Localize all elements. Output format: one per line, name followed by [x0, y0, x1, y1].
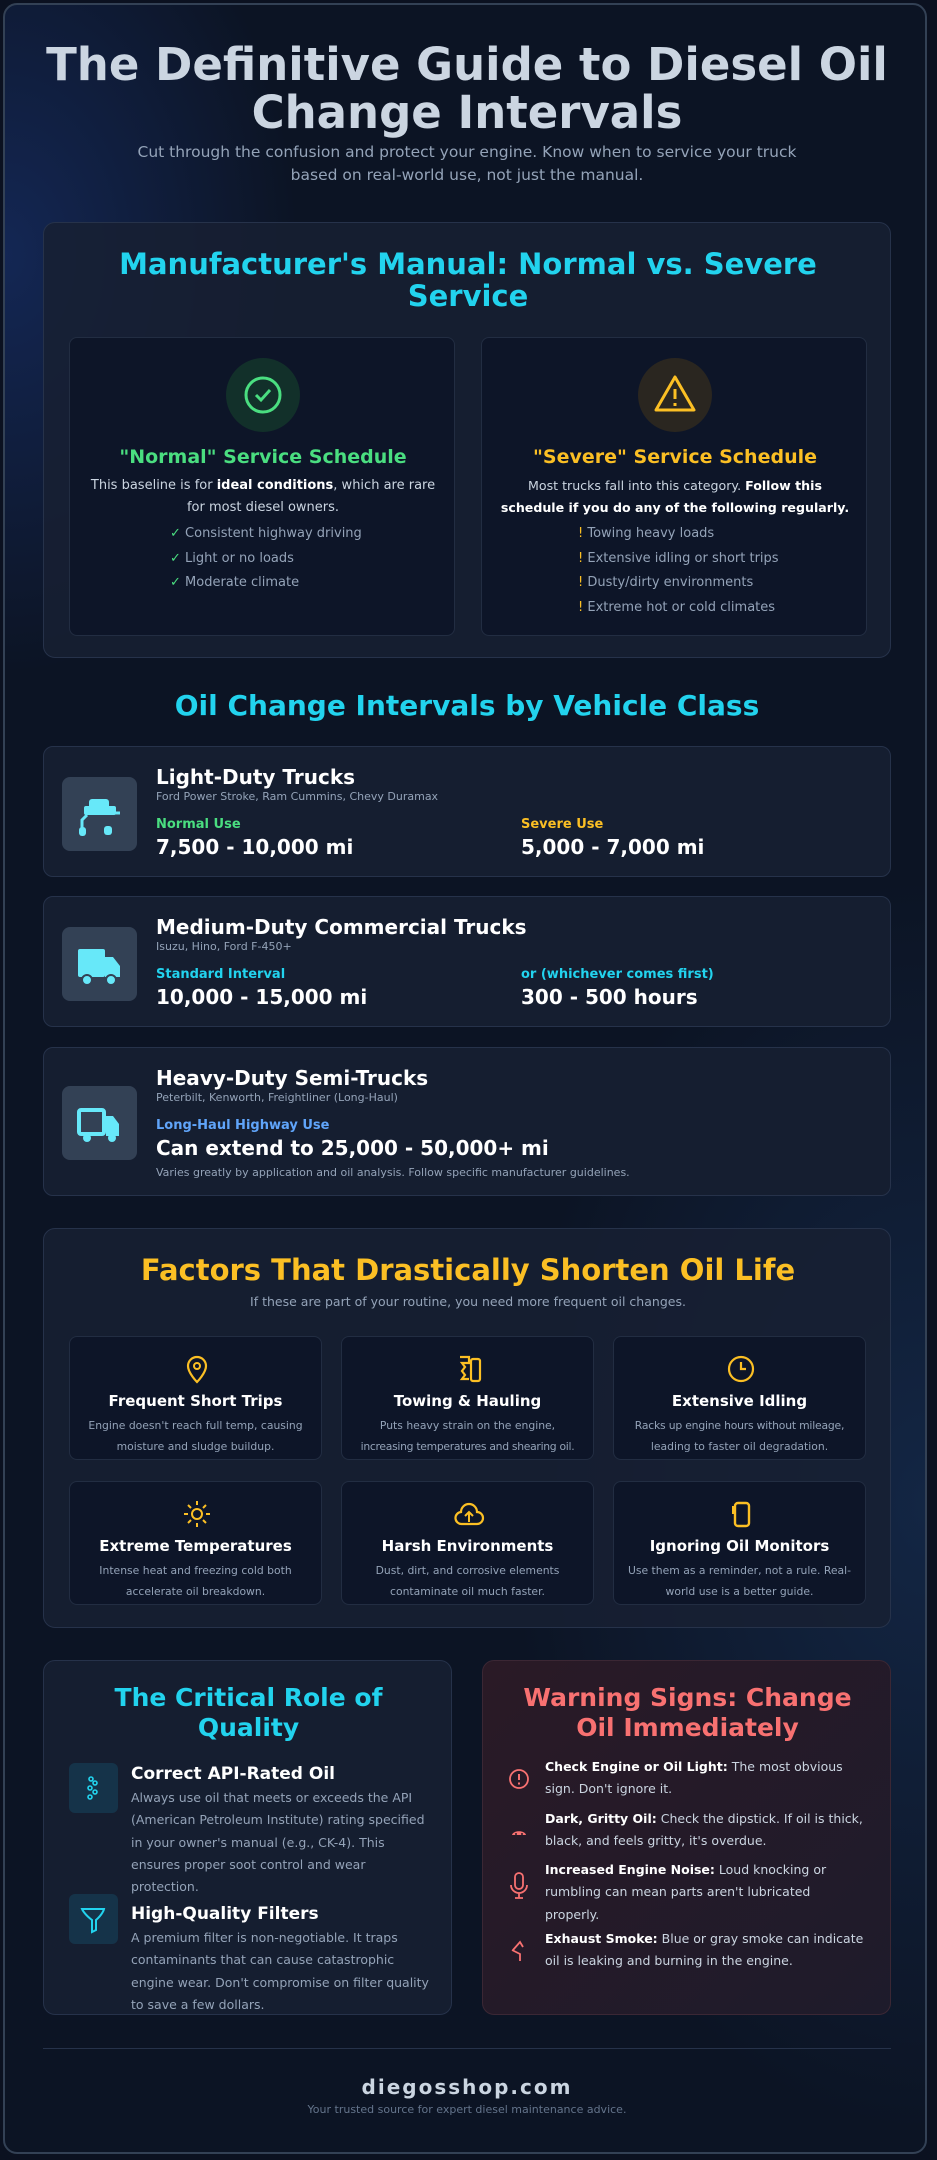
- card: heavy-duty: Peterbilt, Kenworth, Freightliner (Long-Haul): [156, 1091, 398, 1104]
- item: light: sign. Don't ignore it.: [545, 1781, 672, 1796]
- card: heavy-duty: Can extend to 25,000 - 50,000+ mi: [156, 1136, 549, 1160]
- list: [170, 526, 362, 590]
- list: ! Towing heavy loads: [578, 526, 714, 541]
- description: [501, 478, 849, 515]
- panel: warning signs: [482, 1660, 891, 2015]
- item: API oil: Always use oil that meets or exceeds the API (American Petroleum Institute) rating specified in your owner's manual (e.g., CK-4). This ensures proper soot control and wear protection.: [131, 1790, 425, 1894]
- icon: check: [226, 358, 300, 432]
- icon: semi truck: [62, 1086, 137, 1160]
- item: noise: [510, 1862, 826, 1922]
- heading: Service: [408, 279, 528, 313]
- footer: diegosshop.com: [362, 2075, 572, 2099]
- tile: temperatures: accelerate oil breakdown.: [126, 1585, 265, 1598]
- tile: towing: [341, 1336, 594, 1460]
- panel: factors: [43, 1228, 891, 1628]
- item: light: [509, 1759, 843, 1796]
- panel: quality: [43, 1660, 452, 2015]
- title: Change Intervals: [252, 86, 682, 139]
- subheading: If these are part of your routine, you need more frequent oil changes.: [250, 1294, 686, 1309]
- subtitle: [138, 143, 796, 184]
- tile: short trips: moisture and sludge buildup.: [117, 1440, 274, 1453]
- description: This baseline is for ideal conditions, which are rare for most diesel owners.: [91, 478, 435, 515]
- card: medium-duty: 300 - 500 hours: [521, 985, 698, 1009]
- list: ✓ Light or no loads: [170, 550, 294, 566]
- card: medium-duty: Isuzu, Hino, Ford F-450+: [156, 940, 292, 953]
- card: medium-duty: [43, 896, 891, 1027]
- card: light-duty: Ford Power Stroke, Ram Cummins, Chevy Duramax: [156, 790, 438, 803]
- heading: [114, 1683, 383, 1742]
- card title: "Severe" Service Schedule: [533, 446, 817, 468]
- tile: oil monitors: world use is a better guide.: [666, 1585, 813, 1598]
- tile: short trips: Frequent Short Trips: [109, 1392, 282, 1410]
- tile: idling: [613, 1336, 866, 1460]
- card: heavy-duty: Varies greatly by application and oil analysis. Follow specific manufacturer guidelines.: [156, 1166, 630, 1179]
- heading: Warning Signs: Change: [523, 1683, 852, 1712]
- icon: box truck: [62, 927, 137, 1001]
- tile: towing: Towing & Hauling: [394, 1392, 541, 1410]
- heading: Oil Immediately: [576, 1713, 799, 1742]
- heading: [523, 1683, 852, 1742]
- tile: idling: Racks up engine hours without mileage,: [635, 1419, 844, 1432]
- heading: The Critical Role of: [115, 1683, 382, 1712]
- card: heavy-duty: Long-Haul Highway Use: [156, 1118, 329, 1133]
- tile: harsh env: [341, 1481, 594, 1605]
- item: dark oil: Dark, Gritty Oil: Check the dipstick. If oil is thick, black, and feels gritty, it's overdue.: [545, 1811, 863, 1848]
- item: filters: [69, 1894, 429, 2012]
- card: light-duty: Normal Use: [156, 817, 241, 832]
- card: medium-duty: or (whichever comes first): [521, 967, 714, 982]
- item: API oil: Correct API-Rated Oil: [131, 1764, 335, 1784]
- item: noise: Increased Engine Noise: Loud knocking or: [545, 1862, 826, 1877]
- tile: temperatures: Intense heat and freezing cold both: [99, 1564, 292, 1577]
- card: heavy-duty: Heavy-Duty Semi-Trucks: [156, 1066, 428, 1090]
- item: light: Check Engine or Oil Light: The most obvious: [545, 1759, 843, 1774]
- tile: harsh env: Dust, dirt, and corrosive elements: [376, 1564, 559, 1577]
- title: The Definitive Guide to Diesel Oil: [46, 38, 888, 91]
- tile: temperatures: Extreme Temperatures: [99, 1537, 292, 1555]
- item: noise: rumbling can mean parts aren't lubricated: [545, 1884, 810, 1899]
- tile: oil monitors: [613, 1481, 866, 1605]
- tile: short trips: Engine doesn't reach full temp, causing: [88, 1419, 303, 1432]
- tile: oil monitors: Use them as a reminder, not a rule. Real-: [628, 1564, 851, 1577]
- item: filters: A premium filter is non-negotiable. It traps contaminants that can cause catastrophic engine wear. Don't compromise on filter quality to save a few dollars.: [131, 1930, 429, 2012]
- card: heavy-duty: [43, 1047, 891, 1196]
- heading: [119, 247, 817, 313]
- heading: Manufacturer's Manual: Normal vs. Severe: [119, 247, 817, 281]
- card: severe: [481, 337, 867, 636]
- tile: harsh env: contaminate oil much faster.: [390, 1585, 545, 1598]
- icon: warning: [638, 358, 712, 432]
- tile: temperatures: [69, 1481, 322, 1605]
- tile: idling: Extensive Idling: [672, 1392, 807, 1410]
- card: light-duty: 5,000 - 7,000 mi: [521, 835, 704, 859]
- panel: normal vs severe: [43, 222, 891, 658]
- tile: oil monitors: Ignoring Oil Monitors: [650, 1537, 829, 1555]
- description: schedule if you do any of the following regularly.: [501, 500, 849, 515]
- list: [578, 526, 779, 614]
- card: light-duty: Severe Use: [521, 817, 603, 832]
- title: [46, 38, 888, 139]
- footer: [308, 2075, 626, 2116]
- tile: harsh env: Harsh Environments: [382, 1537, 553, 1555]
- footer: Your trusted source for expert diesel maintenance advice.: [308, 2103, 626, 2116]
- tile: towing: increasing temperatures and shearing oil.: [361, 1440, 574, 1453]
- list: ! Dusty/dirty environments: [578, 575, 753, 590]
- heading: Factors That Drastically Shorten Oil Life: [141, 1253, 795, 1287]
- card title: "Normal" Service Schedule: [119, 446, 407, 468]
- tile: short trips: [69, 1336, 322, 1460]
- subtitle: based on real-world use, not just the manual.: [291, 166, 643, 184]
- item: smoke: Exhaust Smoke: Blue or gray smoke can indicate oil is leaking and burning in the engine.: [545, 1931, 863, 1968]
- list: ! Extensive idling or short trips: [578, 550, 779, 566]
- card: light-duty: Light-Duty Trucks: [156, 765, 355, 789]
- list: ✓ Consistent highway driving: [170, 526, 362, 541]
- icon: funnel: [69, 1894, 118, 1944]
- card: medium-duty: Standard Interval: [156, 967, 285, 982]
- card: light-duty: [43, 746, 891, 877]
- card: light-duty: 7,500 - 10,000 mi: [156, 835, 353, 859]
- item: API oil: [69, 1763, 425, 1894]
- item: noise: properly.: [545, 1907, 599, 1922]
- card: normal: [69, 337, 455, 636]
- heading: Quality: [198, 1713, 299, 1742]
- icon: oil: [69, 1763, 118, 1813]
- tile: idling: leading to faster oil degradation.: [651, 1440, 828, 1453]
- item: filters: High-Quality Filters: [131, 1904, 319, 1924]
- list: ✓ Moderate climate: [170, 575, 299, 590]
- tile: towing: Puts heavy strain on the engine,: [380, 1419, 555, 1432]
- card: medium-duty: Medium-Duty Commercial Trucks: [156, 915, 527, 939]
- heading: intervals: Oil Change Intervals by Vehicle Class: [175, 689, 759, 722]
- subtitle: Cut through the confusion and protect your engine. Know when to service your truck: [138, 143, 796, 161]
- card: medium-duty: 10,000 - 15,000 mi: [156, 985, 367, 1009]
- list: ! Extreme hot or cold climates: [578, 600, 775, 614]
- description: Most trucks fall into this category. Follow this: [528, 478, 822, 493]
- icon: pickup: [62, 777, 137, 851]
